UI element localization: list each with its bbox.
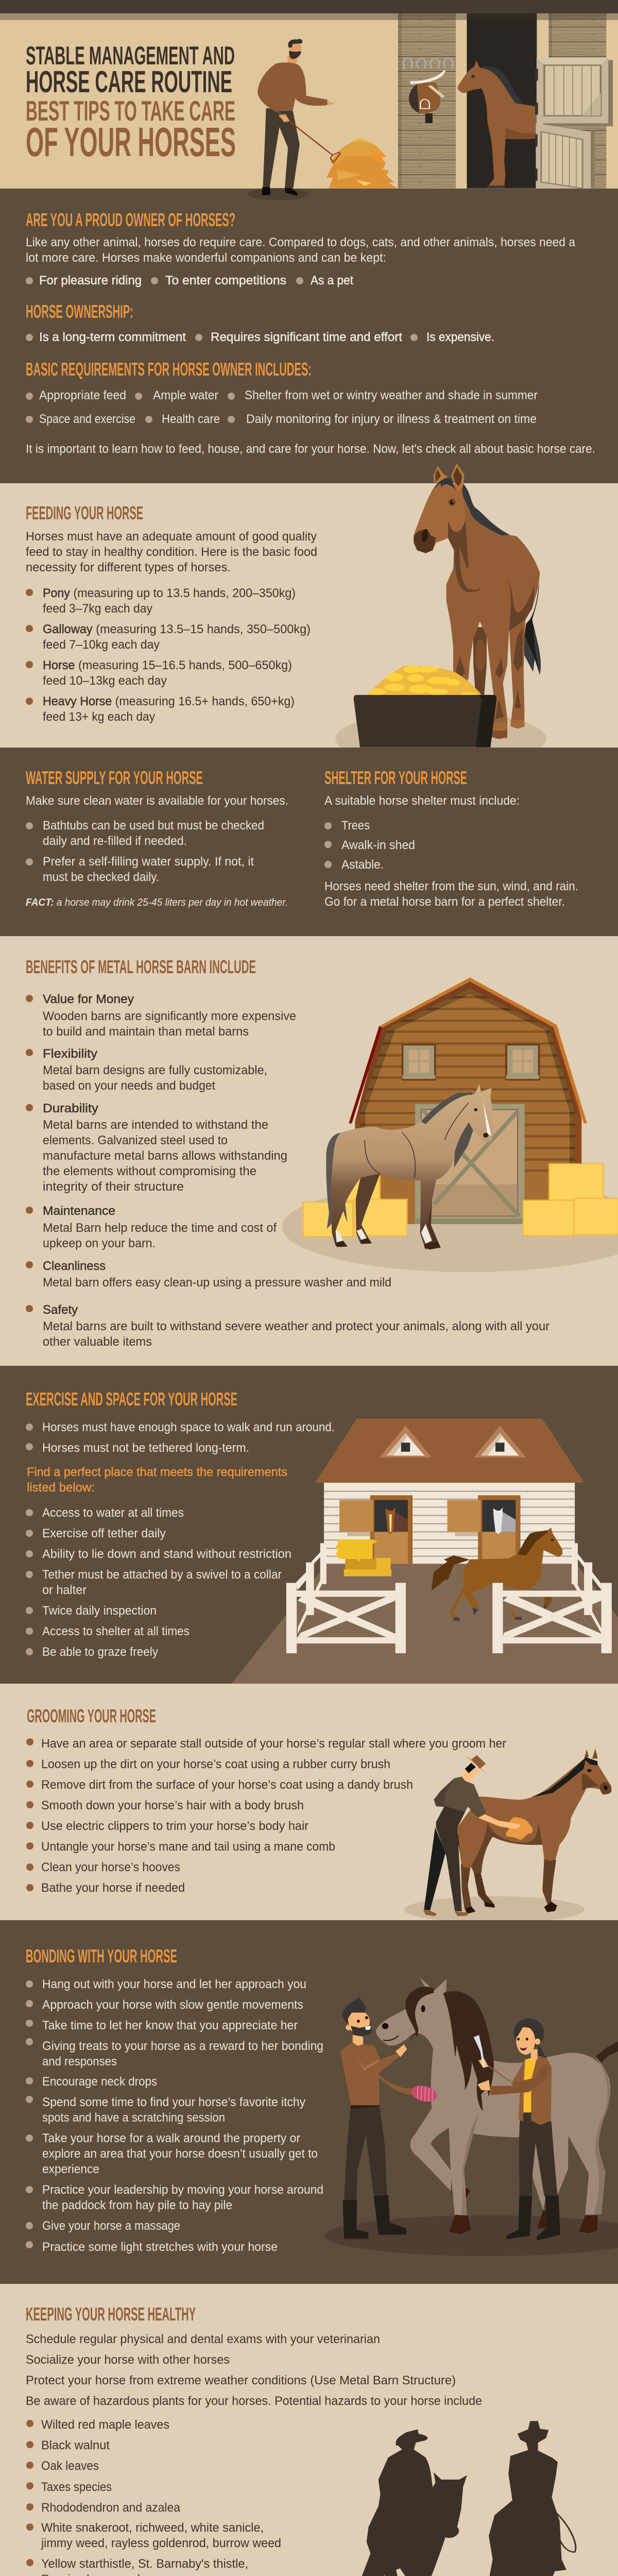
shelter text: A suitable horse shelter must include:: [324, 794, 520, 808]
list: grooming steps: Loosen up the dirt on your horse’s coat using a rubber curry brush: [41, 1757, 390, 1771]
list: reasons to keep horses: [26, 274, 353, 287]
list: benefits: to build and maintain than metal barns: [43, 1025, 249, 1039]
shelter text: Awalk-in shed: [341, 838, 415, 852]
list: hazards: Wilted red maple leaves: [41, 2418, 169, 2432]
title: HORSE CARE ROUTINE: [26, 65, 232, 99]
illustration: stable door lower: [535, 123, 595, 189]
list: bonding tips: spots and have a scratching session: [42, 2111, 225, 2125]
panel: bonding with your horse: [0, 1920, 618, 2284]
list: place requirements: Ability to lie down and stand without restriction: [42, 1547, 291, 1561]
shelter text: Horses need shelter from the sun, wind, and rain.: [324, 879, 578, 893]
list: benefits: upkeep on your barn.: [43, 1236, 156, 1250]
barn windows: [402, 1044, 540, 1080]
list: place requirements: Tether must be attached by a swivel to a collar: [42, 1568, 282, 1582]
list: benefits: [26, 992, 550, 1349]
list: basic requirements: Shelter from wet or wintry weather and shade in summer: [245, 388, 538, 402]
woman figure: [474, 2019, 560, 2241]
intro paragraph: Like any other animal, horses do require care. Compared to dogs, cats, and other animals, horses need a: [26, 235, 576, 249]
list: reasons to keep horses: As a pet: [311, 274, 353, 287]
list: bonding tips: Approach your horse with slow gentle movements: [42, 1998, 303, 2012]
list: reasons to keep horses: To enter competitions: [165, 274, 286, 287]
list: bonding tips: Take time to let her know that you appreciate her: [42, 2019, 298, 2032]
list: bonding tips: Giving treats to your horse as a reward to her bonding: [42, 2039, 323, 2053]
panel: grooming your horse: [0, 1684, 618, 1923]
list: hazards: Rhododendron and azalea: [41, 2501, 181, 2515]
icon: horseshoes: [403, 58, 453, 69]
subheading: find a perfect place: Find a perfect place that meets the requirements: [27, 1465, 287, 1479]
list: bonding tips: Give your horse a massage: [42, 2219, 180, 2233]
list: hazards: jimmy weed, rayless goldenrod, burrow weed: [41, 2536, 281, 2550]
shelter text: Go for a metal horse barn for a perfect shelter.: [324, 895, 565, 909]
feeding paragraph: feed to stay in healthy condition. Here is the basic food: [26, 545, 317, 559]
list: grooming steps: [26, 1737, 506, 1895]
list: benefits: manufacture metal barns allows withstanding: [43, 1149, 287, 1163]
heading: water supply: WATER SUPPLY FOR YOUR HORSE: [26, 767, 203, 788]
list: place requirements: Twice daily inspection: [42, 1604, 157, 1618]
illustration: man grooming horse: [404, 1749, 611, 1923]
list: grooming steps: Clean your horse’s hooves: [41, 1860, 180, 1874]
paddock fence right: [492, 1543, 612, 1653]
panel: keeping your horse healthy: [0, 2284, 618, 2576]
tan horse: [326, 1084, 493, 1249]
illustration: stable door upper: [535, 58, 613, 126]
health tips: Be aware of hazardous plants for your horses. Potential hazards to your horse include: [26, 2394, 482, 2408]
man figure: [340, 1997, 438, 2239]
list: place requirements: Exercise off tether daily: [42, 1527, 166, 1540]
list: basic requirements: Ample water: [153, 388, 218, 402]
list: grooming steps: Smooth down your horse’s hair with a body brush: [41, 1799, 304, 1812]
water text: Make sure clean water is available for your horses.: [26, 794, 288, 808]
heading: grooming: GROOMING YOUR HORSE: [27, 1705, 156, 1726]
list: benefits: the elements without compromising the: [43, 1164, 256, 1178]
list: benefits: other valuable items: [43, 1335, 152, 1349]
heading: are you a proud owner: ARE YOU A PROUD OWNER OF HORSES?: [26, 209, 235, 230]
list: bonding tips: experience: [42, 2162, 99, 2176]
water text: must be checked daily.: [43, 870, 159, 884]
list: grooming steps: Use electric clippers to trim your horse’s body hair: [41, 1819, 308, 1833]
feeding paragraph: Horses must have an adequate amount of good quality: [26, 530, 317, 544]
illustration: riders silhouette: [0, 2421, 618, 2576]
list: benefits: Metal barn designs are fully customizable,: [43, 1063, 267, 1077]
shelter text: [324, 794, 578, 909]
illustration: stable with paddock: [232, 1419, 618, 1684]
icon: saddle: [409, 70, 445, 123]
feeding paragraph: necessity for different types of horses.: [26, 561, 231, 574]
barn door: [414, 1104, 525, 1224]
list: feed amounts by horse type: feed 13+ kg each day: [43, 710, 155, 724]
dormers: [380, 1426, 526, 1458]
list: grooming steps: Have an area or separate stall outside of your horse’s regular stall where you groom her: [41, 1737, 506, 1751]
illustration: brown horse in doorway: [457, 60, 537, 189]
subheading: find a perfect place: [27, 1465, 287, 1495]
panel: exercise and space: [0, 1366, 618, 1684]
panel: footer with silhouettes and references: [0, 2421, 618, 2576]
running horse: [431, 1528, 562, 1621]
list: place requirements: Access to shelter at all times: [42, 1624, 190, 1638]
list: space basics: [26, 1420, 335, 1455]
list: benefits: Wooden barns are significantly more expensive: [43, 1009, 296, 1023]
intro paragraph: [26, 235, 576, 265]
hay bales: [303, 1164, 618, 1236]
list: place requirements: [26, 1506, 291, 1659]
list: basic requirements: Daily monitoring for injury or illness & treatment on time: [246, 412, 537, 426]
list: bonding tips: Practice some light stretches with your horse: [42, 2240, 278, 2254]
list: feed amounts by horse type: [26, 586, 311, 724]
panel: water supply and shelter: [0, 748, 618, 936]
list: hazards: Oak leaves: [41, 2459, 99, 2473]
health tips: [26, 2332, 482, 2408]
illustration: stable scene: [248, 13, 613, 200]
panel: introduction: [0, 189, 618, 483]
list: bonding tips: Encourage neck drops: [42, 2075, 157, 2089]
list: ownership: Is expensive.: [426, 330, 494, 344]
list: benefits: Cleanliness: [43, 1259, 106, 1273]
list: grooming steps: Remove dirt from the surface of your horse’s coat using a dandy brush: [41, 1778, 413, 1792]
list: bonding tips: and responses: [42, 2055, 117, 2069]
list: benefits: integrity of their structure: [43, 1180, 184, 1194]
heading: horse ownership: HORSE OWNERSHIP:: [26, 301, 133, 322]
list: bonding tips: [26, 1977, 323, 2254]
title: [26, 41, 236, 165]
illustration: horse at feed trough: [335, 463, 546, 766]
list: hazards: [26, 2418, 281, 2576]
list: benefits: elements. Galvanized steel used to: [43, 1133, 228, 1147]
list: benefits: Value for Money: [43, 992, 134, 1006]
title: STABLE MANAGEMENT AND: [26, 41, 235, 70]
hay stack: [335, 1539, 391, 1577]
list: benefits: Durability: [43, 1101, 98, 1115]
list: feed amounts by horse type: Horse (measuring 15–16.5 hands, 500–650kg): [43, 658, 292, 672]
list: place requirements: or halter: [42, 1583, 87, 1597]
list: reasons to keep horses: For pleasure riding: [39, 274, 142, 287]
list: hazards: Black walnut: [41, 2438, 110, 2452]
heading: shelter: SHELTER FOR YOUR HORSE: [324, 767, 467, 788]
shelter text: Astable.: [341, 858, 384, 872]
list: basic requirements: Space and exercise: [39, 412, 135, 426]
list: basic requirements: Health care: [162, 412, 220, 426]
illustration: barn, horse and hay: [282, 977, 618, 1272]
water text: daily and re-filled if needed.: [43, 834, 187, 848]
list: benefits: Maintenance: [43, 1204, 115, 1218]
health tips: Protect your horse from extreme weather conditions (Use Metal Barn Structure): [26, 2374, 456, 2387]
water text: Bathtubs can be used but must be checked: [43, 819, 264, 833]
list: benefits: Metal barn offers easy clean-up using a pressure washer and mild: [43, 1276, 391, 1290]
list: feed amounts by horse type: feed 7–10kg each day: [43, 638, 160, 652]
list: ownership: Requires significant time and effort: [211, 330, 402, 344]
list: ownership: [26, 330, 494, 344]
list: benefits: Metal barns are intended to withstand the: [43, 1118, 268, 1132]
list: feed amounts by horse type: Galloway (measuring 13.5–15 hands, 350–500kg): [43, 622, 311, 636]
list: grooming steps: Untangle your horse’s mane and tail using a mane comb: [41, 1840, 335, 1854]
intro paragraph: lot more care. Horses make wonderful companions and can be kept:: [26, 251, 386, 265]
list: space basics: Horses must have enough space to walk and run around.: [42, 1420, 335, 1434]
panel: feeding your horse: [0, 463, 618, 766]
heading: feeding: FEEDING YOUR HORSE: [26, 502, 143, 523]
fact callout: FACT: a horse may drink 25-45 liters per day in hot weather.: [26, 897, 288, 908]
water text: Prefer a self-filling water supply. If not, it: [43, 855, 254, 869]
list: bonding tips: Practice your leadership by moving your horse around: [42, 2183, 323, 2197]
list: bonding tips: the paddock from hay pile to hay pile: [42, 2198, 232, 2212]
illustration: people bonding with grey horse: [324, 1978, 618, 2256]
list: ownership: Is a long-term commitment: [39, 330, 186, 344]
list: place requirements: Access to water at all times: [42, 1506, 184, 1520]
list: grooming steps: Bathe your horse if needed: [41, 1881, 185, 1895]
list: feed amounts by horse type: feed 10–13kg each day: [43, 674, 167, 688]
list: bonding tips: Spend some time to find your horse’s favorite itchy: [42, 2095, 305, 2109]
paddock fence left: [286, 1543, 406, 1653]
list: benefits: based on your needs and budget: [43, 1079, 215, 1093]
list: bonding tips: explore an area that your horse doesn’t usually get to: [42, 2147, 318, 2161]
list: feed amounts by horse type: Heavy Horse (measuring 16.5+ hands, 650+kg): [43, 694, 295, 708]
heading: basic requirements: BASIC REQUIREMENTS FOR HORSE OWNER INCLUDES:: [26, 359, 312, 380]
heading: exercise: EXERCISE AND SPACE FOR YOUR HORSE: [26, 1388, 237, 1410]
illustration: man with pitchfork: [248, 39, 340, 200]
feeding paragraph: [26, 530, 317, 574]
list: feed amounts by horse type: Pony (measuring up to 13.5 hands, 200–350kg): [43, 586, 296, 600]
title: OF YOUR HORSES: [26, 119, 236, 165]
stall doors: [339, 1495, 520, 1564]
list: hazards: White snakeroot, richweed, white sanicle,: [41, 2521, 264, 2535]
subheading: find a perfect place: listed below:: [27, 1481, 95, 1495]
heading: bonding: BONDING WITH YOUR HORSE: [26, 1945, 177, 1967]
list: basic requirements: Appropriate feed: [39, 388, 126, 402]
list: place requirements: Be able to graze freely: [42, 1645, 158, 1659]
list: feed amounts by horse type: feed 3–7kg each day: [43, 602, 152, 616]
shelter text: Trees: [341, 819, 370, 833]
title: BEST TIPS TO TAKE CARE: [26, 95, 235, 127]
list: benefits: Safety: [43, 1303, 78, 1317]
list: hazards: Yellow starthistle, St. Barnaby's thistle,: [41, 2557, 248, 2571]
closing paragraph: It is important to learn how to feed, house, and care for your horse. Now, let's check all about basic horse care.: [26, 442, 595, 456]
health tips: Socialize your horse with other horses: [26, 2353, 230, 2367]
list: space basics: Horses must not be tethered long-term.: [42, 1441, 249, 1455]
list: bonding tips: Take your horse for a walk around the property or: [42, 2131, 300, 2145]
heading: keeping healthy: KEEPING YOUR HORSE HEALTHY: [26, 2303, 196, 2325]
list: benefits: Flexibility: [43, 1047, 97, 1061]
heading: benefits: BENEFITS OF METAL HORSE BARN INCLUDE: [26, 956, 256, 977]
list: hazards: Taxes species: [41, 2480, 112, 2494]
list: bonding tips: Hang out with your horse and let her approach you: [42, 1977, 306, 1991]
water text: [26, 794, 288, 884]
list: benefits: Metal barns are built to withstand severe weather and protect your animals, along with all your: [43, 1319, 550, 1333]
panel: benefits of metal horse barn: [0, 936, 618, 1366]
list: basic requirements: [26, 388, 538, 426]
list: benefits: Metal Barn help reduce the time and cost of: [43, 1221, 277, 1235]
illustration: hay pile: [327, 138, 397, 189]
panel: hero header: [0, 0, 618, 200]
health tips: Schedule regular physical and dental exams with your veterinarian: [26, 2332, 380, 2346]
